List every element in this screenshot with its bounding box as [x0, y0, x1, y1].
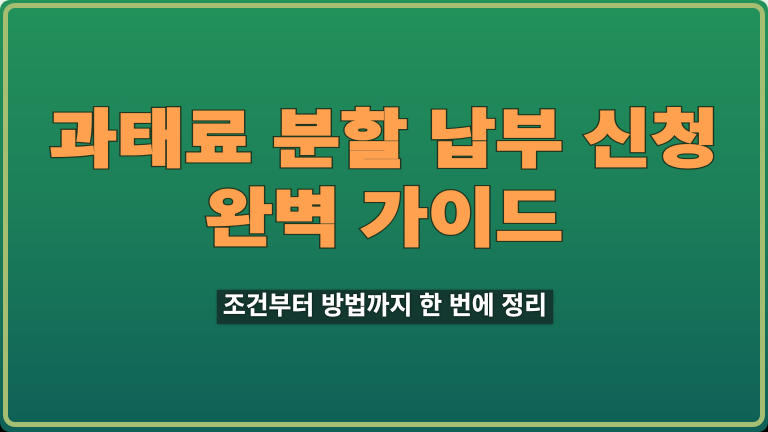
title line 2: 완벽 가이드 [205, 183, 563, 254]
subtitle caption: 조건부터 방법까지 한 번에 정리 [223, 293, 547, 320]
title line 1: 과태료 분할 납부 신청 [49, 104, 719, 175]
